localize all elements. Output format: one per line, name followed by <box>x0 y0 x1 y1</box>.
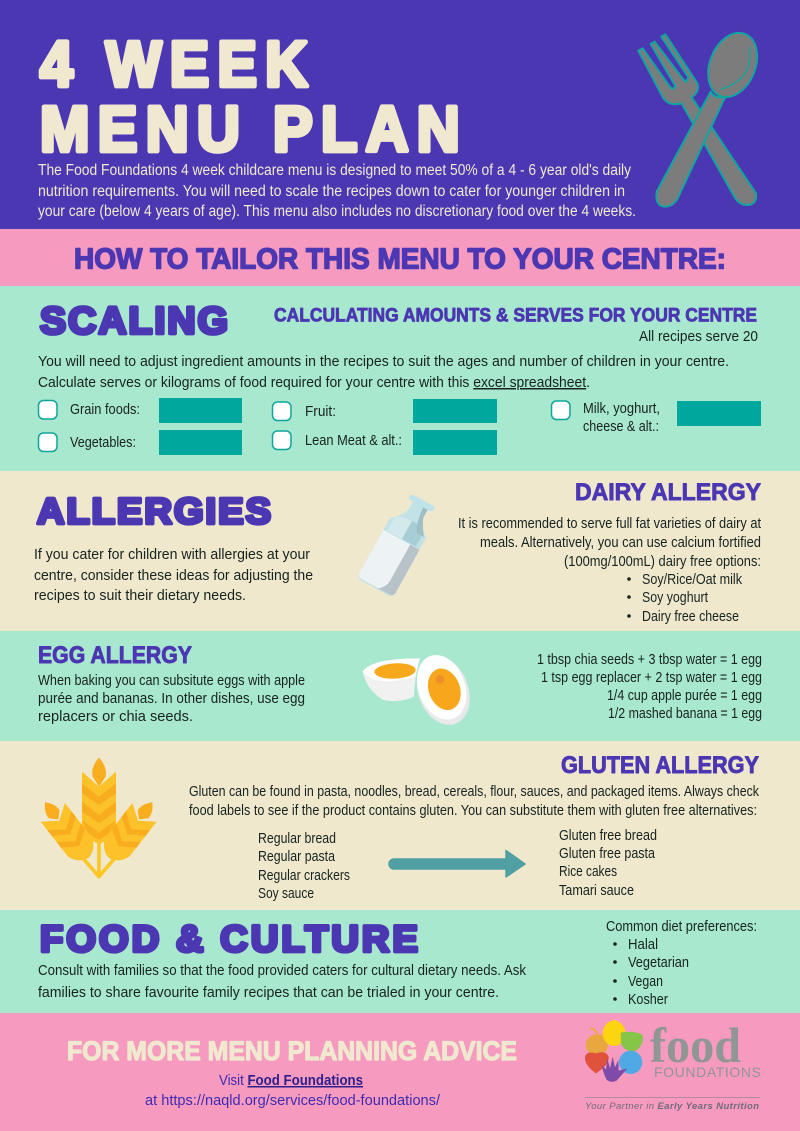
egg substitutes: 1 tsp egg replacer + 2 tsp water = 1 egg <box>541 669 762 686</box>
gluten text <box>189 783 759 819</box>
checklist <box>38 398 761 455</box>
intro text: your care (below 4 years of age). This menu also includes no discretionary food over the 4 weeks. <box>38 203 636 220</box>
intro text: nutrition requirements. You will need to scale the recipes down to cater for younger children in <box>38 183 625 200</box>
dairy text: (100mg/100mL) dairy free options: <box>564 553 761 570</box>
panel: food and culture <box>0 910 800 1013</box>
gluten free list: Tamari sauce <box>559 882 634 899</box>
panel: tailor banner <box>0 229 800 286</box>
dairy text <box>458 515 762 625</box>
panel: gluten allergy <box>0 741 800 910</box>
panel: header <box>0 0 800 229</box>
scaling text: You will need to adjust ingredient amounts in the recipes to suit the ages and number of children in your centre. <box>38 353 729 370</box>
checklist: Lean Meat & alt.: <box>305 432 402 449</box>
logo: food foundations <box>585 1017 761 1112</box>
heading: scaling: SCALING <box>40 300 230 342</box>
culture text: Consult with families so that the food provided caters for cultural dietary needs. Ask <box>38 962 526 979</box>
allergies text: centre, consider these ideas for adjusting the <box>34 567 313 584</box>
scaling text <box>38 353 729 391</box>
logo: food foundations: FOUNDATIONS <box>654 1064 761 1080</box>
regular foods list: Soy sauce <box>258 885 314 902</box>
regular foods list: Regular pasta <box>258 848 336 865</box>
egg text: replacers or chia seeds. <box>38 708 193 725</box>
note: All recipes serve 20 <box>639 328 758 345</box>
egg substitutes: 1/4 cup apple purée = 1 egg <box>607 687 762 704</box>
heading: gluten allergy: GLUTEN ALLERGY <box>561 752 759 779</box>
icon: wheat <box>33 758 164 877</box>
panel: allergies <box>0 471 800 631</box>
intro text <box>38 162 636 220</box>
footer link text: at https://naqld.org/services/food-foundations/ <box>145 1092 441 1109</box>
heading: egg allergy: EGG ALLERGY <box>38 642 192 669</box>
icon: milk bottle <box>357 490 441 598</box>
egg text <box>38 672 305 725</box>
panel: egg allergy <box>0 631 800 741</box>
dairy text: Soy yoghurt <box>642 589 709 606</box>
diet preferences: Vegetarian <box>628 954 689 971</box>
scaling text: Calculate serves or kilograms of food required for your centre with this excel spreadsheet. <box>38 374 590 391</box>
allergies text <box>34 546 313 604</box>
gluten free list: Gluten free pasta <box>559 845 656 862</box>
regular foods list: Regular crackers <box>258 867 350 884</box>
egg text: purée and bananas. In other dishes, use egg <box>38 690 305 707</box>
title: 4 WEEK <box>40 28 316 100</box>
gluten free list: Gluten free bread <box>559 827 657 844</box>
panel: scaling <box>0 286 800 471</box>
checklist: Fruit: <box>305 403 336 420</box>
gluten free list <box>559 827 657 899</box>
regular foods list <box>258 830 350 902</box>
culture text: families to share favourite family recipes that can be trialed in your centre. <box>38 984 499 1001</box>
title: MENU PLAN <box>40 93 468 165</box>
egg text: When baking you can subsitute eggs with apple <box>38 672 305 689</box>
egg substitutes <box>537 651 762 722</box>
diet preferences: Kosher <box>628 991 668 1008</box>
logo: food foundations: food <box>650 1017 741 1073</box>
allergies text: If you cater for children with allergies at your <box>34 546 310 563</box>
egg substitutes: 1/2 mashed banana = 1 egg <box>608 705 762 722</box>
icon: boiled eggs <box>363 648 479 732</box>
diet preferences: Halal <box>628 936 658 953</box>
footer link text <box>145 1072 441 1109</box>
icon: fork and spoon <box>638 26 766 207</box>
logo: food foundations: Your Partner in Early Years Nutrition <box>585 1101 759 1112</box>
subheading: CALCULATING AMOUNTS & SERVES FOR YOUR CENTRE <box>274 306 757 326</box>
heading: HOW TO TAILOR THIS MENU TO YOUR CENTRE: <box>74 244 726 276</box>
footer link text: Visit Food Foundations <box>219 1072 363 1089</box>
intro text: The Food Foundations 4 week childcare menu is designed to meet 50% of a 4 - 6 year old's daily <box>38 162 631 179</box>
checklist: Vegetables: <box>70 434 136 451</box>
allergies text: recipes to suit their dietary needs. <box>34 587 246 604</box>
diet preferences: Common diet preferences: <box>606 918 757 935</box>
heading: food and culture: FOOD & CULTURE <box>40 918 421 960</box>
heading: dairy allergy: DAIRY ALLERGY <box>575 479 761 506</box>
dairy text: Soy/Rice/Oat milk <box>642 571 742 588</box>
diet preferences: Vegan <box>628 973 663 990</box>
arrow <box>389 850 525 877</box>
heading: allergies: ALLERGIES <box>37 490 273 532</box>
egg substitutes: 1 tbsp chia seeds + 3 tbsp water = 1 egg <box>537 651 762 668</box>
title <box>40 28 468 165</box>
diet preferences <box>606 918 757 1008</box>
footer heading: FOR MORE MENU PLANNING ADVICE <box>67 1036 517 1066</box>
checklist: Milk, yoghurt, <box>583 400 660 417</box>
gluten free list: Rice cakes <box>559 863 617 880</box>
regular foods list: Regular bread <box>258 830 336 847</box>
dairy text: meals. Alternatively, you can use calcium fortified <box>480 534 761 551</box>
panel: footer <box>0 1013 800 1131</box>
checklist: cheese & alt.: <box>583 418 659 435</box>
checklist: Grain foods: <box>70 401 140 418</box>
culture text <box>38 962 526 1001</box>
dairy text: Dairy free cheese <box>642 608 739 625</box>
